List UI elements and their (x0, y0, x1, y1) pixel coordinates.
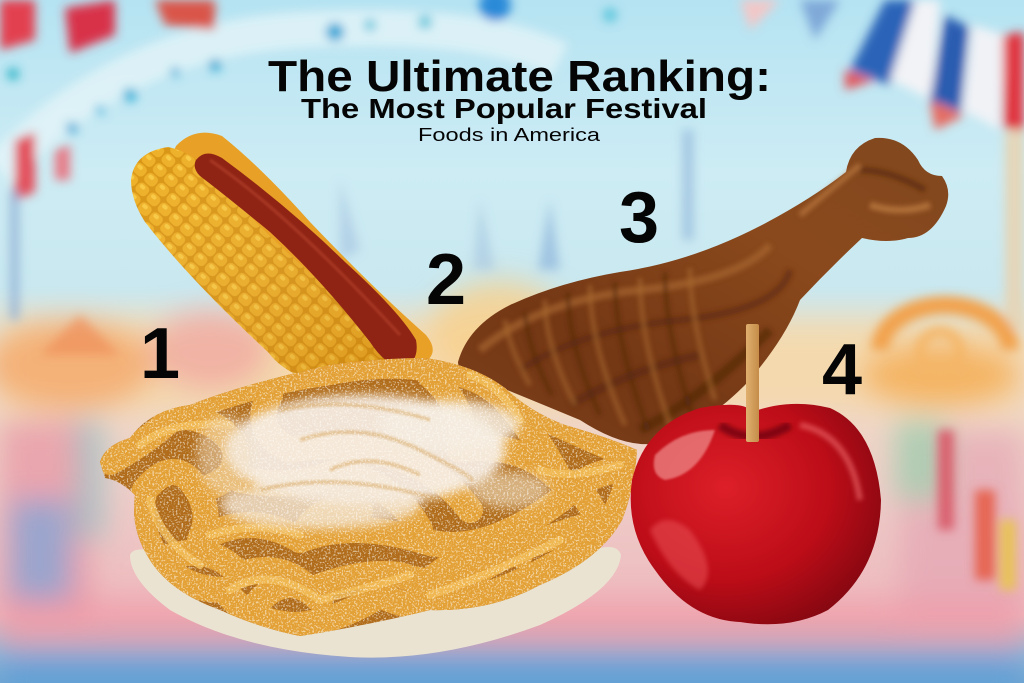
icon: corn dog (131, 133, 433, 376)
apple body (631, 404, 881, 624)
corn dog bun (170, 133, 433, 372)
icon: funnel cake on plate (90, 350, 650, 658)
title line 3: Foods in America (418, 125, 601, 145)
icon: turkey leg (458, 138, 948, 444)
sausage (195, 153, 417, 368)
sugar grain (100, 358, 637, 636)
corn cob (131, 147, 405, 376)
rank number 4: 4 (822, 330, 862, 410)
rank number 3: 3 (619, 178, 659, 258)
fried dough (100, 358, 637, 636)
plate (130, 547, 621, 658)
icon: candy apple (631, 324, 881, 624)
title line 1: The Ultimate Ranking: (268, 52, 771, 101)
title line 2: The Most Popular Festival (301, 93, 707, 124)
powdered sugar (197, 395, 550, 529)
title (268, 52, 771, 145)
rank number 2: 2 (426, 240, 466, 320)
rank number 1: 1 (140, 314, 180, 394)
stick (746, 324, 759, 442)
